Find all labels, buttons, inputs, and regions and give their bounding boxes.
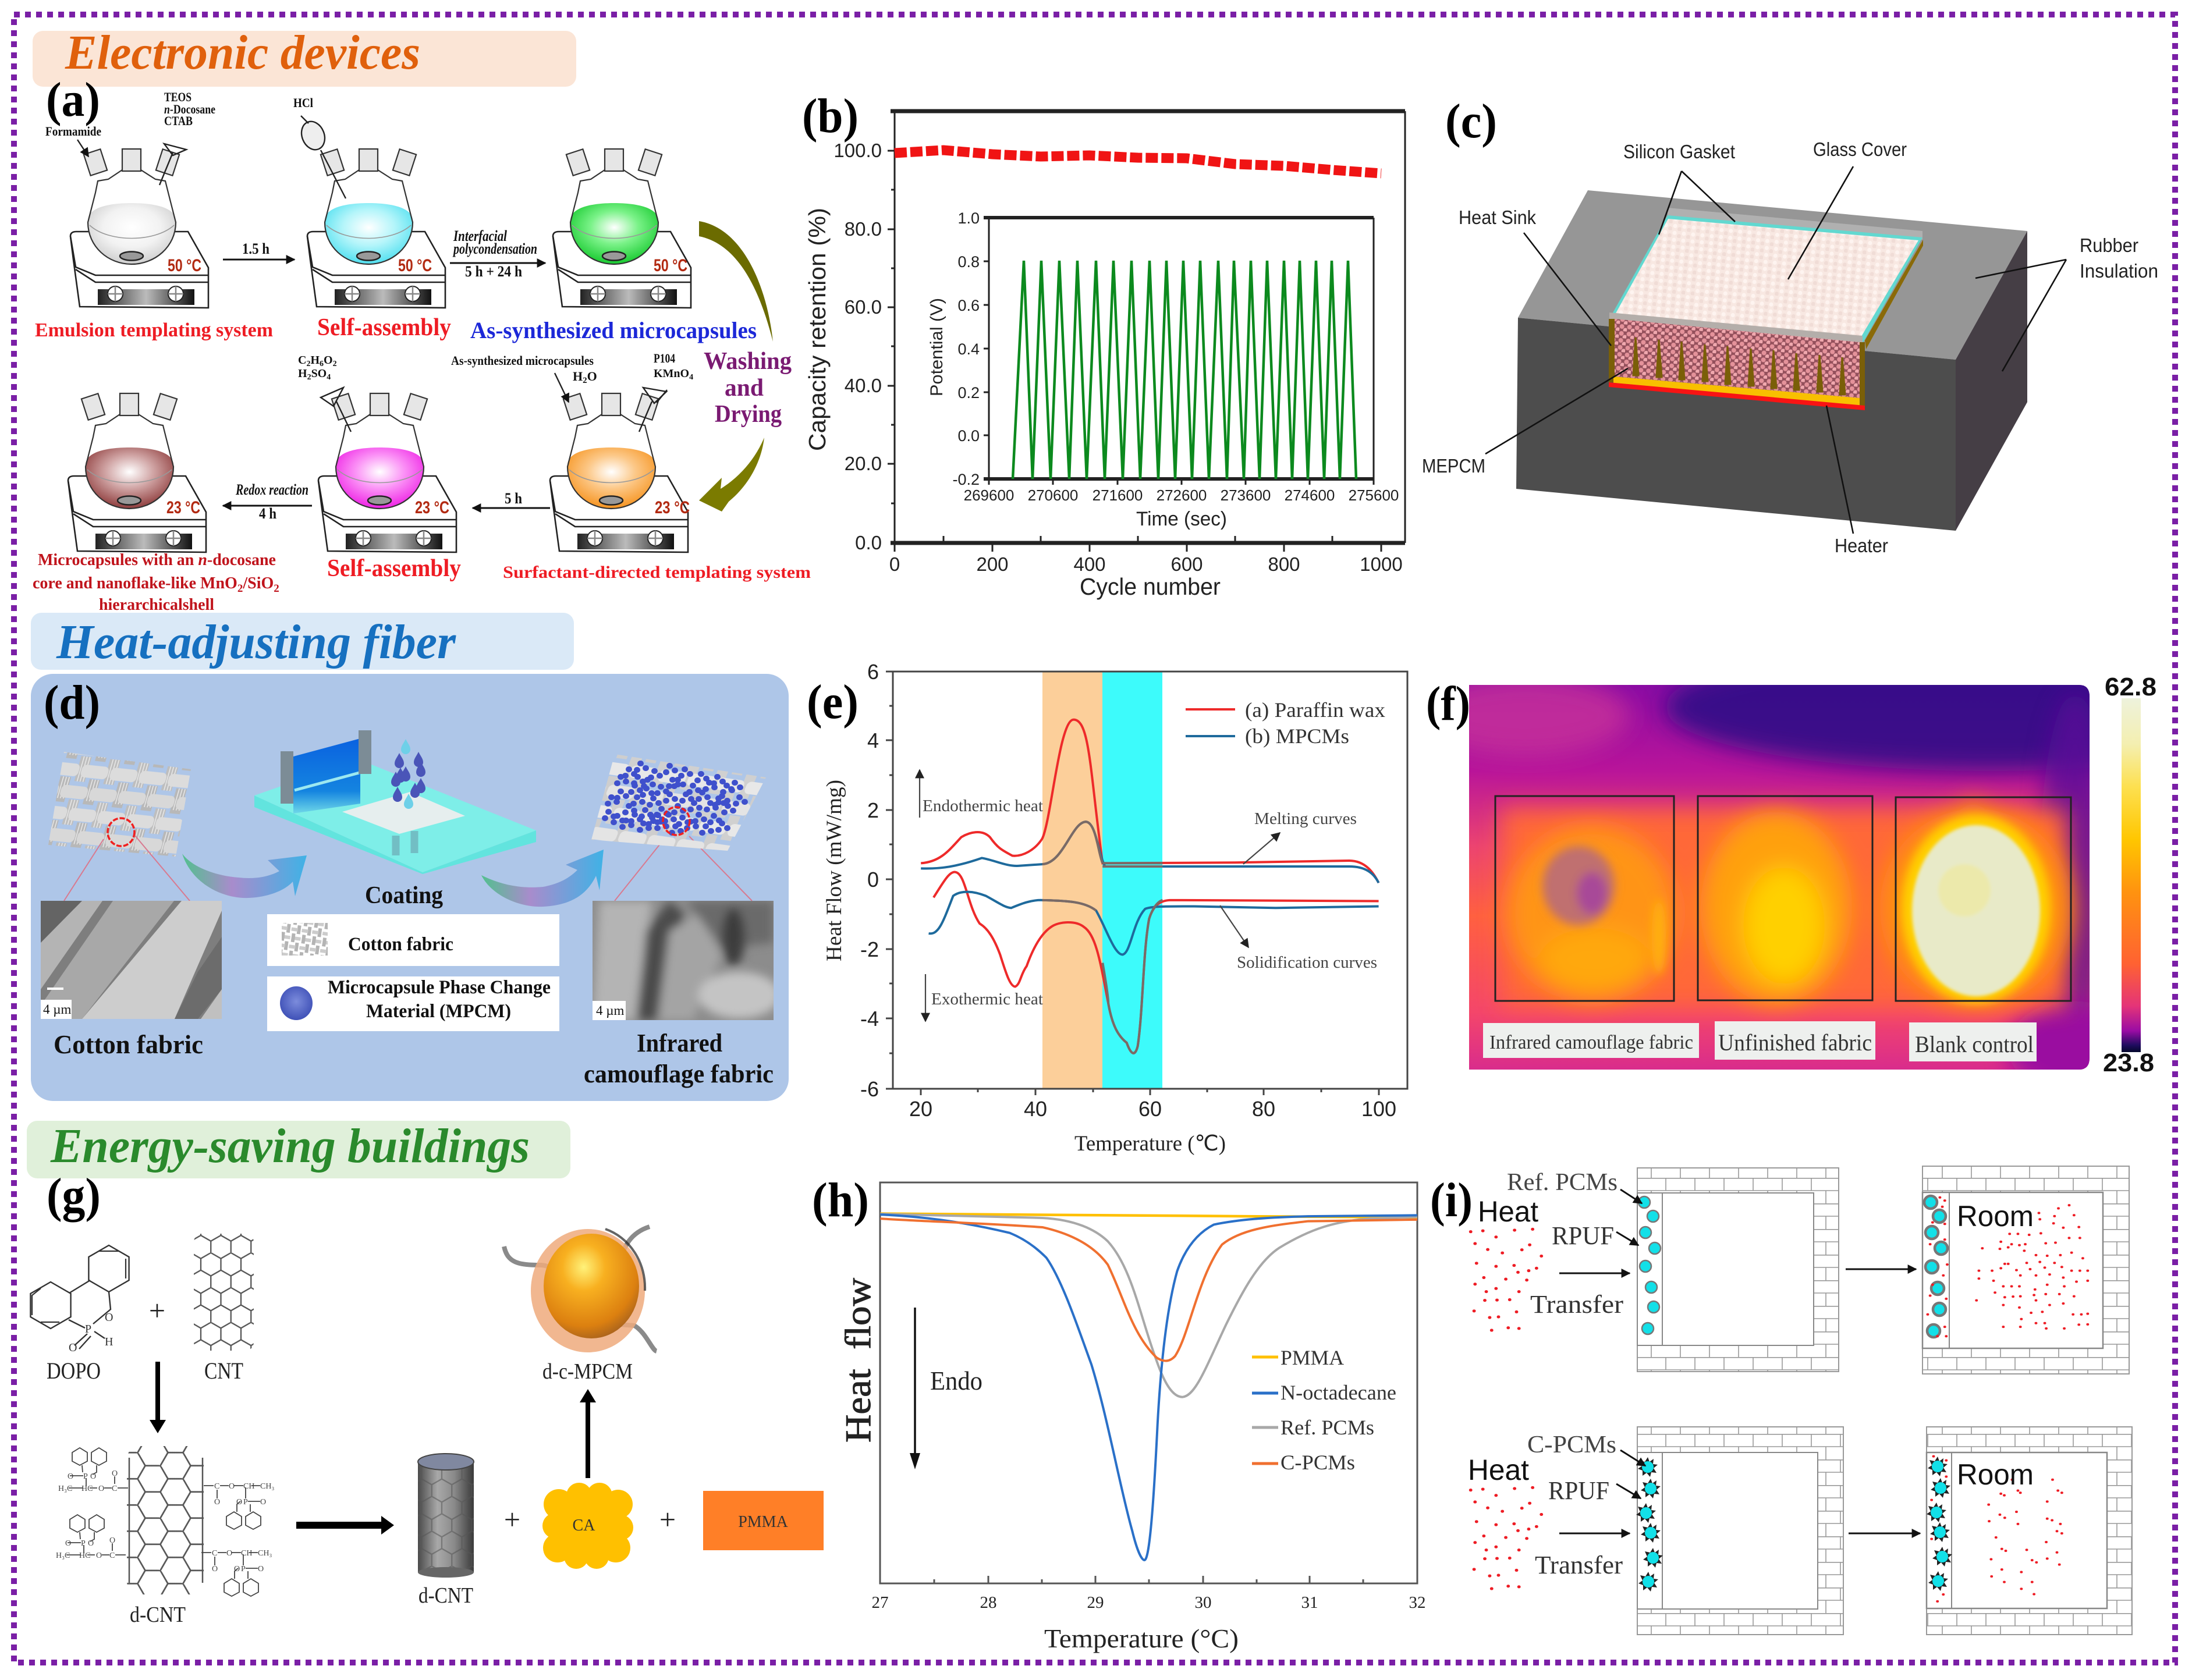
PMMA box	[703, 1491, 824, 1550]
step captions	[54, 882, 774, 1088]
reagent labels: P104	[654, 351, 675, 365]
zoom lines	[64, 836, 752, 901]
heading: Electronic devices	[33, 26, 576, 87]
reagent labels: Formamide	[45, 124, 101, 138]
flask: emulsion	[70, 149, 208, 308]
stage captions: Self-assembly	[327, 555, 461, 582]
schematic labels: C-PCMs	[1527, 1432, 1616, 1458]
axis titles: Temperature (℃)	[1074, 1132, 1226, 1156]
reagent labels: CTAB	[164, 113, 193, 128]
schematic labels: Ref. PCMs	[1507, 1169, 1618, 1196]
heat sink fins	[1633, 338, 1845, 395]
block right	[1956, 231, 2027, 531]
grey overprint where curves cross the bands	[1042, 822, 1162, 1053]
process conditions: 4 h	[259, 505, 276, 522]
y tick labels: -4	[860, 1007, 879, 1031]
inset y labels: 0.0	[957, 427, 980, 445]
component labels: Glass Cover	[1813, 138, 1907, 160]
label (e): (e)	[807, 675, 859, 729]
swoosh arrow 1	[182, 854, 307, 898]
axes	[880, 1182, 1417, 1583]
inset x labels: 275600	[1349, 486, 1399, 504]
reagent labels	[45, 90, 693, 385]
y tick labels: 60.0	[845, 296, 882, 318]
DOPO molecule: H	[105, 1336, 113, 1348]
ticks	[888, 151, 1381, 552]
teal gasket	[1609, 215, 1922, 343]
SEM scale coated	[593, 1001, 626, 1020]
inset x labels: 269600	[964, 486, 1014, 504]
stage captions: 2	[274, 583, 279, 595]
inset y title: Potential (V)	[927, 298, 946, 396]
panel (g): d-c-MPCM synthesis	[30, 1168, 824, 1627]
DOPO label: DOPO	[47, 1358, 101, 1384]
label (h): (h)	[812, 1173, 869, 1227]
stage captions: Surfactant-directed templating system	[503, 563, 811, 582]
arrow up	[580, 1389, 596, 1478]
stage captions: core and nanoflake-like MnO	[33, 574, 237, 592]
schematic labels: Transfer	[1530, 1290, 1623, 1319]
process conditions: 5 h	[505, 490, 522, 507]
annotations: Melting curves	[1254, 810, 1357, 828]
inset x labels	[964, 486, 1399, 504]
d-CNT functionalised	[56, 1446, 274, 1596]
red heater	[1609, 382, 1865, 410]
heat particles top left	[1470, 1229, 1542, 1330]
x tick labels: 100	[1361, 1097, 1396, 1121]
d-c-MPCM sphere	[504, 1227, 657, 1352]
legend box MPCM: Material (MPCM)	[366, 1001, 511, 1022]
reagent labels: HCl	[293, 95, 313, 110]
glass cover	[1615, 219, 1918, 339]
inset y labels	[952, 209, 980, 488]
x tick labels: 20	[909, 1097, 932, 1121]
y tick labels: 100.0	[833, 140, 882, 161]
coating drops	[391, 739, 425, 809]
colour bar	[2122, 698, 2141, 1052]
inset x labels: 270600	[1028, 486, 1078, 504]
label (a): (a)	[46, 73, 100, 127]
x tick labels: 28	[980, 1593, 996, 1612]
legend: (a) Paraffin wax	[1245, 698, 1385, 722]
reagent labels: 2	[583, 376, 587, 385]
swoosh arrow 2	[481, 850, 604, 907]
x tick labels: 30	[1194, 1593, 1212, 1612]
annotations	[923, 797, 1377, 1008]
room: C-PCMs before	[1636, 1427, 1843, 1635]
x tick labels: 80	[1252, 1097, 1275, 1121]
component labels: Rubber	[2080, 235, 2138, 256]
olive curved arrow top	[699, 221, 773, 342]
label (c): (c)	[1445, 94, 1497, 148]
inset x labels: 273600	[1221, 486, 1271, 504]
process conditions: polycondensation	[452, 240, 537, 257]
x tick labels: 0	[889, 553, 900, 575]
axes	[893, 672, 1407, 1089]
x tick labels: 60	[1138, 1097, 1162, 1121]
CA cloud	[542, 1483, 633, 1569]
olive curved arrow bottom	[699, 438, 764, 512]
coating blade	[293, 738, 360, 814]
curves	[880, 1214, 1417, 1560]
flask: orange surfactant	[550, 393, 688, 552]
measurement boxes	[1495, 796, 2071, 1001]
y tick labels: 4	[867, 729, 879, 752]
y axis title: Heat flow	[839, 1278, 878, 1443]
legend box fabric	[267, 914, 559, 966]
caption: infrared camouflage fabric: Infrared camouflage fabric	[1489, 1032, 1693, 1053]
SEM image coated	[593, 901, 780, 1020]
axis titles: Cycle number	[1080, 573, 1221, 600]
heat particles room top right	[1928, 1198, 2088, 1336]
DOPO molecule: P	[85, 1323, 91, 1336]
legend: PMMA	[1281, 1346, 1344, 1369]
DOPO molecule: O	[69, 1341, 77, 1354]
ticks	[886, 672, 1379, 1095]
stage captions: Self-assembly	[317, 314, 451, 341]
panel (d): infrared camouflage fabric process	[31, 674, 789, 1101]
reagent labels: TEOS	[164, 90, 191, 104]
ticks	[934, 1576, 1363, 1583]
inset ticks	[984, 261, 1374, 485]
process conditions: Redox reaction	[235, 481, 308, 498]
schematic labels: Heat	[1478, 1195, 1538, 1228]
component labels: Heater	[1835, 535, 1888, 556]
x tick labels: 31	[1301, 1593, 1318, 1612]
arrow down	[150, 1362, 166, 1433]
process conditions: 1.5 h	[242, 240, 269, 257]
inset y labels: 0.2	[957, 384, 980, 402]
panel (i): building heat transfer schematics	[1430, 1166, 2132, 1635]
schematic labels: RPUF	[1548, 1476, 1609, 1505]
inset x title: Time (sec)	[1136, 508, 1227, 530]
y tick labels	[833, 140, 882, 553]
stage captions: Emulsion templating system	[35, 319, 273, 341]
reagent labels: H	[298, 367, 307, 380]
temperatures: 23 °C	[655, 498, 690, 517]
reagent labels: 4	[327, 373, 331, 382]
DOPO molecule	[30, 1245, 129, 1354]
reagent labels: 2	[307, 373, 311, 382]
block front	[1516, 318, 1956, 531]
room: C-PCMs after	[1927, 1427, 2132, 1635]
x tick labels: 29	[1087, 1593, 1104, 1612]
flask: brown final	[68, 393, 206, 552]
panel background	[31, 674, 789, 1101]
d-CNT cylinder label: d-CNT	[418, 1583, 473, 1608]
endo label: Endo	[930, 1366, 982, 1395]
temperatures: 50 °C	[168, 256, 201, 275]
legend: (b) MPCMs	[1245, 724, 1349, 748]
housing side walls	[1609, 319, 1615, 382]
inset x labels: 274600	[1285, 486, 1335, 504]
SEM image cotton	[41, 901, 222, 1019]
y axis title: Capacity retention (%)	[804, 208, 831, 451]
caption: unfinished fabric	[1715, 1021, 1875, 1060]
x tick labels: 1000	[1360, 553, 1403, 575]
y tick labels: 2	[867, 798, 879, 822]
plus: +	[504, 1503, 520, 1536]
label (f): (f)	[1426, 677, 1470, 731]
washing and drying label: Washing	[704, 348, 792, 375]
gold heat spreader	[1613, 377, 1860, 406]
heading: Electronic devices: Electronic devices	[65, 26, 420, 80]
reagent labels: C	[298, 354, 306, 367]
process conditions: 5 h + 24 h	[465, 263, 522, 280]
PMMA box: PMMA	[738, 1513, 789, 1531]
stage captions: As-synthesized microcapsules	[470, 317, 757, 343]
reagent labels: As-synthesized microcapsules	[451, 353, 594, 368]
temperatures: 23 °C	[415, 498, 449, 517]
fabric sheet	[342, 792, 465, 834]
y tick labels: -6	[860, 1077, 879, 1101]
label (g): (g)	[47, 1168, 101, 1223]
inset y labels: 0.4	[957, 340, 980, 358]
process arrows	[223, 260, 550, 508]
panel (c): heat sink test block	[1422, 94, 2158, 556]
schematic labels: Heat	[1468, 1454, 1529, 1486]
step captions: Coating	[365, 882, 443, 909]
legend box MPCM	[267, 976, 559, 1031]
d-CNT label: d-CNT	[130, 1603, 186, 1627]
y tick labels: 0	[867, 868, 879, 891]
schematic labels	[1468, 1169, 2034, 1579]
schematic arrows	[1559, 1189, 1920, 1533]
reagent labels: n-Docosane	[164, 102, 215, 116]
legend: Ref. PCMs	[1281, 1416, 1374, 1439]
x tick labels: 800	[1268, 553, 1300, 575]
legend	[1186, 698, 1385, 748]
x tick labels	[889, 553, 1403, 575]
reagent labels: 6	[320, 360, 324, 368]
SEM scale cotton: 4 µm	[43, 1002, 72, 1017]
label (i): (i)	[1430, 1173, 1473, 1227]
SEM scale cotton	[41, 988, 72, 1019]
x tick labels: 40	[1024, 1097, 1047, 1121]
x tick labels: 27	[872, 1593, 888, 1612]
component labels: Insulation	[2080, 260, 2158, 282]
colour bar max: 62.8	[2105, 673, 2156, 701]
cotton fabric mesh	[48, 752, 191, 857]
schematic labels: Transfer	[1535, 1551, 1623, 1579]
temperatures: 23 °C	[166, 498, 200, 517]
stage captions	[33, 314, 811, 614]
stage captions: /SiO	[242, 574, 274, 592]
plus: +	[659, 1503, 676, 1536]
y tick labels: 80.0	[845, 218, 882, 240]
y tick labels: 40.0	[845, 375, 882, 396]
step captions: Cotton fabric	[54, 1029, 203, 1059]
colour bar min: 23.8	[2103, 1049, 2154, 1077]
schematic labels: Room	[1957, 1200, 2034, 1233]
label (b): (b)	[802, 89, 859, 143]
capacity series	[895, 150, 1381, 173]
step captions: Infrared	[637, 1029, 722, 1057]
housing right wall	[1860, 342, 1865, 409]
y tick labels: 20.0	[845, 453, 882, 474]
inset y labels: -0.2	[952, 471, 980, 488]
reagent labels: H	[573, 369, 583, 383]
annotations: Endothermic heat	[923, 797, 1043, 815]
d-c-MPCM label: d-c-MPCM	[542, 1359, 633, 1384]
flask: cyan self-assembly	[307, 149, 445, 308]
heading: Heat-adjusting fiber: Heat-adjusting fiber	[56, 615, 456, 669]
reagent labels: SO	[311, 367, 327, 380]
inset x labels: 271600	[1092, 486, 1143, 504]
CNT label: CNT	[204, 1358, 243, 1384]
thermal image	[1420, 643, 2185, 1094]
reagent labels: O	[587, 369, 597, 383]
y tick labels: 0.0	[855, 532, 882, 553]
legend: N-octadecane	[1281, 1381, 1396, 1404]
d-CNT cylinder	[418, 1454, 474, 1578]
cross-section with MEPCM	[1615, 319, 1860, 398]
annotations: Exothermic heat	[931, 990, 1043, 1008]
annotation arrows	[920, 770, 1280, 1021]
schematic labels: RPUF	[1552, 1221, 1614, 1250]
axes	[895, 111, 1405, 543]
gasket front strip	[1609, 312, 1863, 343]
inset y labels: 1.0	[957, 209, 980, 227]
panel (b): capacity retention chart	[802, 89, 1405, 600]
x tick labels: 200	[976, 553, 1009, 575]
DOPO molecule: O	[105, 1311, 113, 1324]
temperatures	[166, 256, 690, 517]
endo arrow	[910, 1308, 920, 1469]
washing and drying label	[704, 348, 792, 428]
stage captions: Microcapsules with an n-docosane	[38, 551, 276, 569]
curves	[921, 720, 1379, 1053]
x tick labels	[872, 1593, 1426, 1612]
inset axes	[989, 218, 1374, 479]
y axis title: Heat Flow (mW/mg)	[822, 780, 846, 961]
reagent labels: 2	[306, 360, 310, 368]
stage captions: hierarchicalshell	[99, 596, 214, 614]
x tick labels: 600	[1170, 553, 1203, 575]
component labels: Silicon Gasket	[1623, 141, 1735, 162]
panel (e): DSC heat flow chart	[807, 660, 1407, 1156]
reagent labels: O	[324, 354, 333, 367]
coating slab	[254, 730, 536, 874]
step captions: camouflage fabric	[584, 1060, 774, 1088]
temperatures: 50 °C	[398, 256, 432, 275]
component labels: MEPCM	[1422, 455, 1485, 477]
panel (a): microcapsule synthesis scheme	[33, 73, 811, 614]
reagent labels: 2	[333, 360, 337, 368]
funnels and reagent pointers	[77, 116, 667, 432]
process conditions	[235, 228, 537, 522]
panel (f): thermal image	[1428, 677, 2156, 1072]
caption: blank control: Blank control	[1915, 1031, 2034, 1057]
flask: green microcapsules	[553, 149, 691, 308]
zoom circle right	[663, 807, 690, 835]
heat particles room bottom right	[1931, 1457, 2062, 1601]
reagent labels: KMnO	[654, 367, 689, 380]
caption: blank control	[1909, 1022, 2037, 1061]
x tick labels	[909, 1097, 1396, 1121]
component labels: Heat Sink	[1459, 207, 1536, 228]
inset y labels: 0.6	[957, 297, 980, 314]
heading: Energy-saving buildings: Energy-saving buildings	[50, 1119, 530, 1173]
reagent labels: 4	[689, 373, 693, 382]
panel (h): heat flow curves	[812, 1173, 1426, 1653]
solidification band	[1102, 672, 1162, 1089]
annotations: Solidification curves	[1237, 954, 1377, 972]
washing and drying label: Drying	[715, 401, 782, 428]
leader lines	[1485, 166, 2066, 534]
melting band	[1042, 672, 1102, 1089]
room: ref PCMs after	[1922, 1166, 2129, 1374]
inset x labels: 272600	[1157, 486, 1207, 504]
component labels	[1422, 138, 2158, 556]
plus: +	[149, 1294, 165, 1327]
coated fabric	[591, 754, 766, 851]
schematic labels: Room	[1957, 1458, 2034, 1491]
arrow right	[296, 1516, 394, 1535]
y tick labels: -2	[860, 937, 879, 961]
legend box fabric: Cotton fabric	[348, 934, 453, 955]
temperatures: 50 °C	[654, 256, 687, 275]
x tick labels: 400	[1073, 553, 1106, 575]
x axis title: Temperature (°C)	[1044, 1624, 1239, 1653]
legend	[1252, 1346, 1396, 1474]
caption: infrared camouflage fabric	[1483, 1023, 1699, 1058]
x tick labels: 32	[1409, 1593, 1426, 1612]
inset charge-discharge curve	[1013, 261, 1356, 479]
block top	[1518, 190, 2027, 360]
legend box MPCM: Microcapsule Phase Change	[328, 977, 551, 998]
y tick labels	[860, 660, 879, 1101]
silicon gasket back strip	[1668, 208, 1922, 240]
heat particles bottom left	[1470, 1487, 1542, 1589]
washing and drying label: and	[725, 375, 764, 402]
label (d): (d)	[44, 676, 100, 730]
stage captions: 2	[237, 583, 243, 595]
caption: unfinished fabric: Unfinished fabric	[1718, 1029, 1872, 1056]
y tick labels: 6	[867, 660, 879, 684]
legend: C-PCMs	[1281, 1451, 1355, 1474]
flask: magenta self-assembly	[318, 393, 456, 552]
CA cloud: CA	[573, 1516, 595, 1535]
CNT tube	[194, 1234, 254, 1351]
SEM scale coated: 4 µm	[596, 1003, 625, 1018]
brown housing edge	[1865, 240, 1923, 349]
room: ref PCMs before	[1637, 1168, 1839, 1372]
reagent labels: H	[310, 354, 320, 367]
zoom circle left	[108, 818, 134, 846]
inset y labels: 0.8	[957, 253, 980, 271]
process conditions: Interfacial	[453, 228, 508, 244]
